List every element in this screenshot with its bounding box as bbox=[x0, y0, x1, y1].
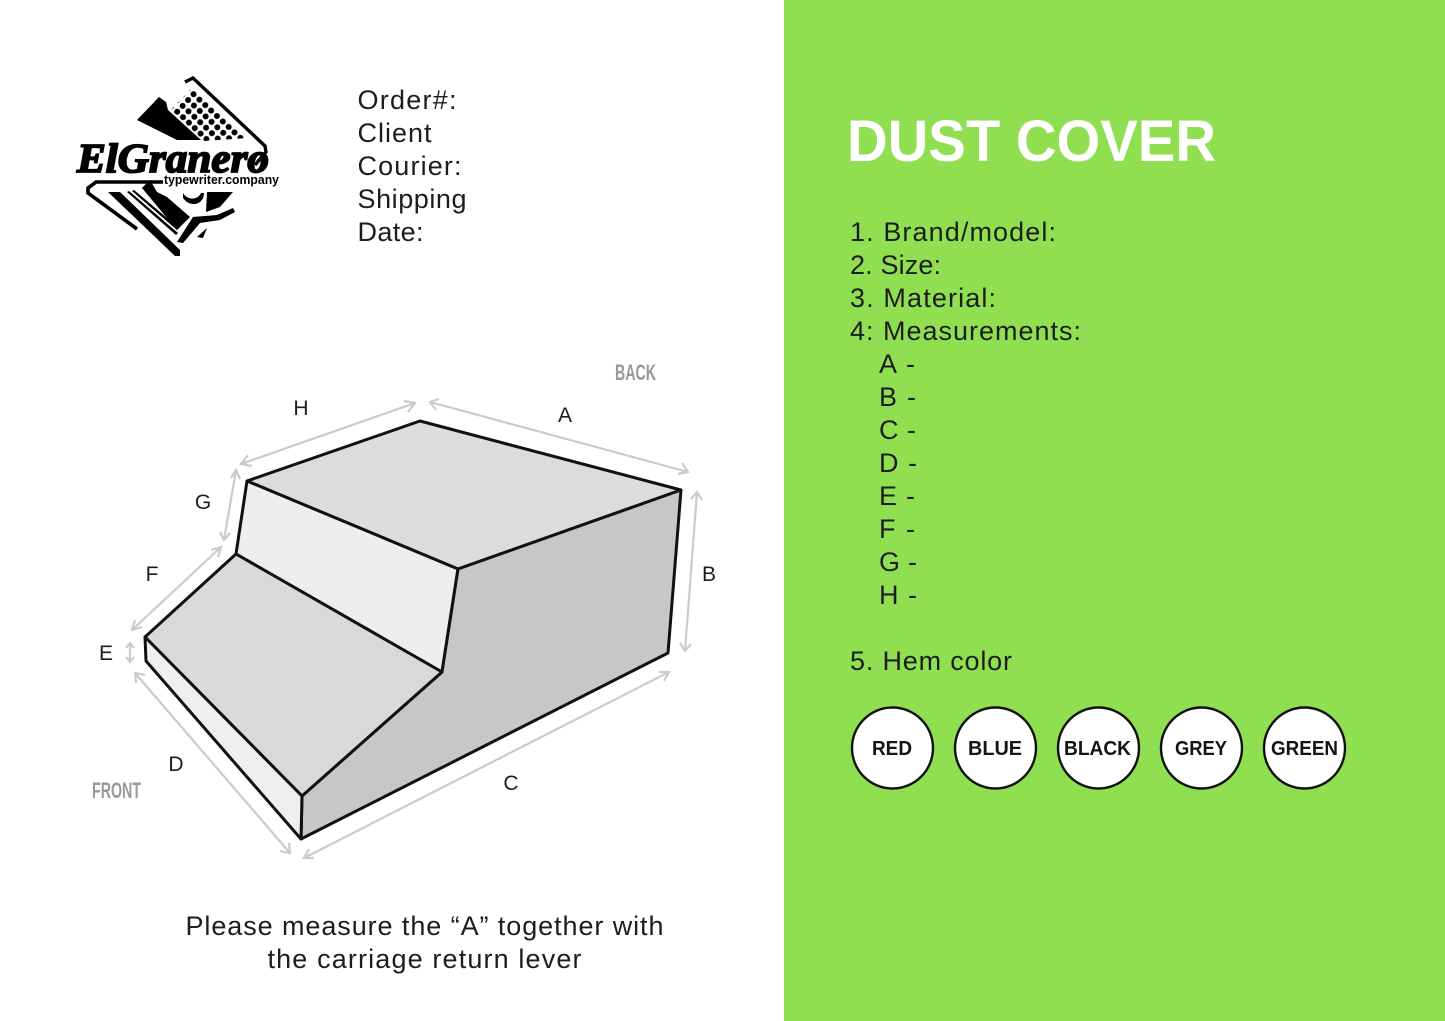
text block: specification list: E - bbox=[879, 481, 915, 511]
measurement labels bbox=[99, 397, 716, 795]
arrow C bbox=[304, 672, 669, 858]
option: grey bbox=[1161, 708, 1242, 788]
arrow F bbox=[132, 547, 221, 630]
text block: specification list: G - bbox=[879, 547, 917, 577]
diagram: typewriter box bbox=[145, 421, 681, 839]
box front face bbox=[145, 637, 302, 839]
icon: El Granero logo: ElGranero bbox=[76, 135, 269, 181]
text block: specification list bbox=[850, 217, 1081, 676]
box side face bbox=[301, 490, 681, 839]
box sloped face bbox=[145, 554, 442, 796]
option: black bbox=[1058, 708, 1139, 788]
arrow A bbox=[430, 399, 688, 474]
text block: specification list: D - bbox=[879, 448, 917, 478]
arrow B bbox=[680, 492, 702, 651]
text block: order details: Courier: bbox=[358, 151, 462, 181]
option: blue bbox=[955, 708, 1036, 788]
measurement labels: G bbox=[195, 491, 211, 514]
icon: El Granero logo bbox=[76, 78, 279, 256]
measurement labels: A bbox=[558, 404, 572, 427]
option: green bbox=[1264, 708, 1345, 788]
arrow H bbox=[241, 401, 415, 466]
option: blue: BLUE bbox=[968, 738, 1022, 760]
heading: dust cover: DUST COVER bbox=[847, 109, 1216, 174]
measurement labels: B bbox=[702, 563, 716, 586]
option: red bbox=[852, 708, 933, 788]
text block: order details bbox=[358, 85, 466, 247]
text block: order details: Date: bbox=[358, 217, 424, 247]
text block: specification list: 4: Measurements: bbox=[850, 316, 1081, 346]
icon: El Granero logo: typewriter.company bbox=[164, 173, 279, 187]
text block: order details: Shipping bbox=[358, 184, 466, 214]
text block: specification list: 2. Size: bbox=[850, 250, 941, 280]
arrow G bbox=[220, 470, 240, 540]
text block: specification list: 3. Material: bbox=[850, 283, 996, 313]
arrow E bbox=[126, 643, 134, 662]
text block: specification list: F - bbox=[879, 514, 915, 544]
arrow D bbox=[135, 673, 290, 853]
panel: green sidebar bbox=[784, 0, 1445, 1021]
text block: specification list: H - bbox=[879, 580, 917, 610]
text block: order details: Order#: bbox=[358, 85, 456, 115]
option: red: RED bbox=[872, 738, 912, 760]
measurement labels: D bbox=[168, 753, 184, 776]
text block: specification list: 5. Hem color bbox=[850, 646, 1012, 676]
measurement labels: H bbox=[293, 397, 309, 420]
text block: order details: Client bbox=[358, 118, 432, 148]
measurement labels: E bbox=[99, 642, 113, 665]
box top face bbox=[247, 421, 681, 569]
option: green: GREEN bbox=[1271, 738, 1338, 760]
text block: specification list: C - bbox=[879, 415, 916, 445]
label: back: BACK bbox=[615, 360, 656, 385]
measurement labels: C bbox=[503, 772, 519, 795]
measurement labels: F bbox=[146, 563, 158, 586]
text block: specification list: 1. Brand/model: bbox=[850, 217, 1056, 247]
text block: measuring note bbox=[186, 911, 664, 974]
measurement arrows bbox=[126, 399, 702, 858]
label: front: FRONT bbox=[92, 778, 141, 803]
box step face bbox=[236, 481, 458, 672]
text block: specification list: B - bbox=[879, 382, 916, 412]
option: grey: GREY bbox=[1175, 738, 1228, 760]
hem color options bbox=[852, 708, 1345, 788]
text block: specification list: A - bbox=[879, 349, 915, 379]
text block: measuring note: the carriage return lever bbox=[268, 944, 582, 974]
text block: measuring note: Please measure the “A” together with bbox=[186, 911, 664, 941]
option: black: BLACK bbox=[1064, 738, 1132, 760]
